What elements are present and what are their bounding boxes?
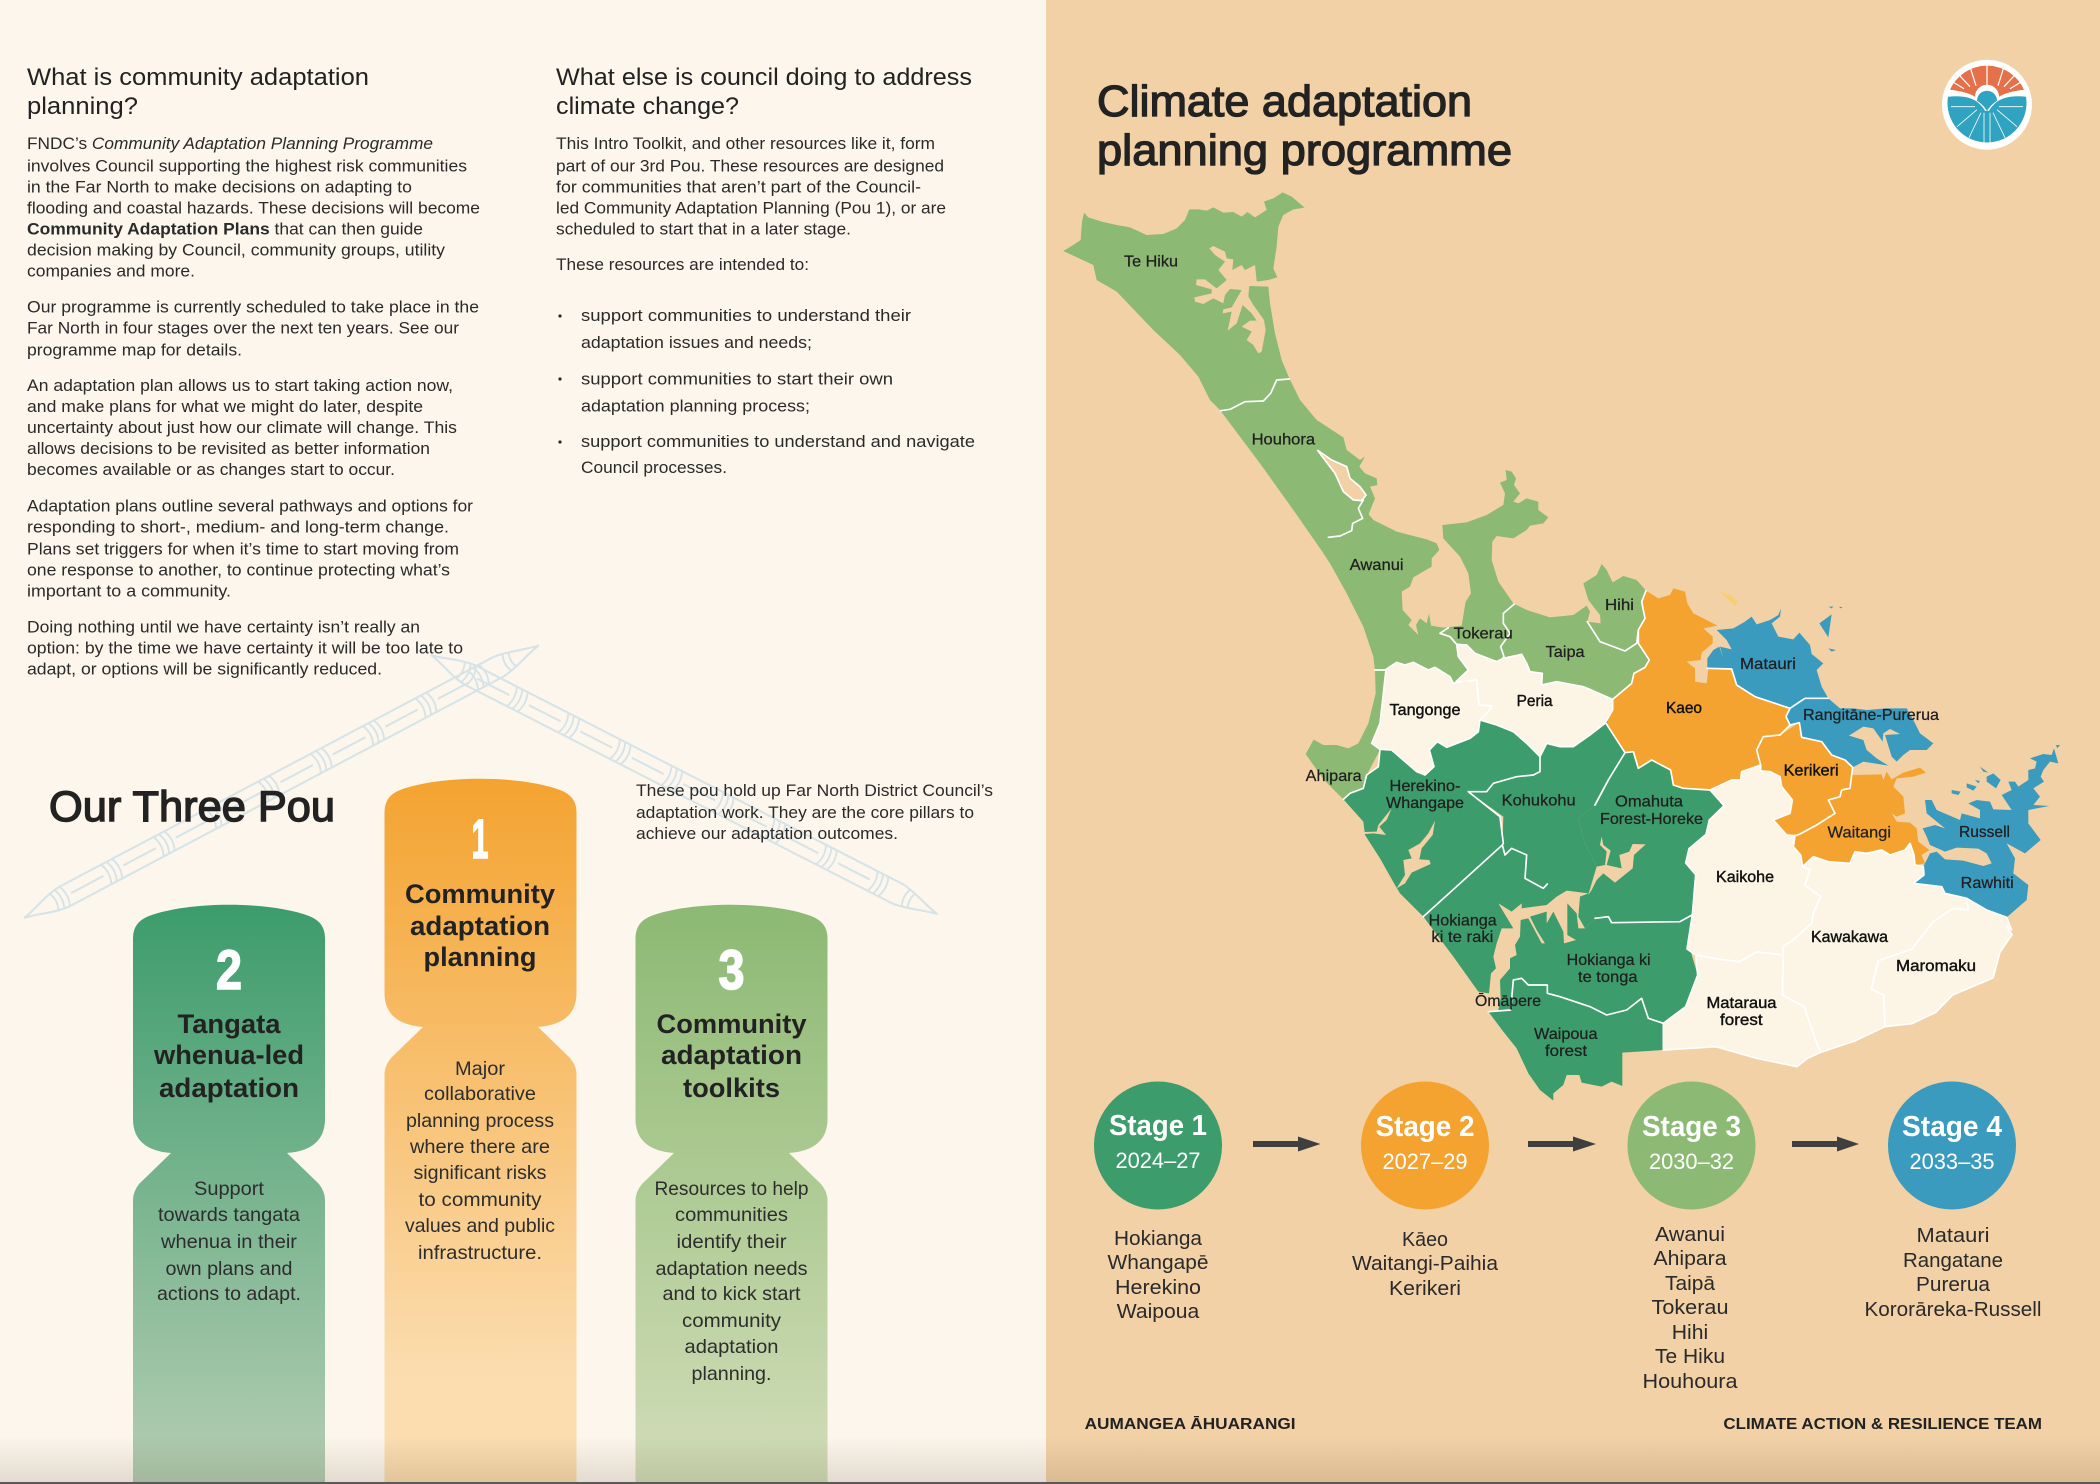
description: values and public	[405, 1215, 555, 1237]
map labels: Kerikeri	[1784, 763, 1839, 780]
description: where there are	[409, 1136, 550, 1158]
title: climate adaptation planning programme: planning programme	[1097, 126, 1512, 175]
description: community	[682, 1310, 781, 1332]
text: pou intro: adaptation work. They are the core pillars to	[636, 804, 974, 822]
pillar 2: tangata whenua-led adaptation	[133, 905, 325, 1484]
bullet list: adaptation issues and needs;	[581, 334, 812, 352]
crossed rafter poles	[19, 636, 942, 928]
paragraph 5: Doing nothing until we have certainty isn’t really an	[27, 618, 420, 636]
stage 4: Stage 4	[1902, 1111, 2002, 1143]
description: identify their	[676, 1231, 787, 1253]
title: Community	[656, 1009, 806, 1039]
description	[654, 1178, 809, 1385]
map labels: Whangape	[1386, 795, 1464, 812]
stage 4 areas: Matauri	[1916, 1225, 1990, 1247]
text: pou intro	[636, 782, 993, 843]
region: rangitane-purerua	[1786, 698, 1933, 767]
map labels: forest	[1720, 1012, 1763, 1029]
bullet list: adaptation planning process;	[581, 397, 810, 415]
region: kaikohe	[1686, 765, 1821, 962]
paragraph 2: programme map for details.	[27, 341, 242, 359]
map: far north district adaptation areas	[1063, 192, 2060, 1101]
stage 1 areas	[1108, 1228, 1208, 1323]
paragraph 4: one response to another, to continue protecting what’s	[27, 562, 450, 580]
description: actions to adapt.	[157, 1283, 301, 1305]
description: Major	[455, 1058, 506, 1080]
pillar 1: community adaptation planning	[384, 779, 576, 1484]
paragraph 3: uncertainty about just how our climate will change. This	[27, 419, 457, 437]
title: adaptation	[159, 1073, 299, 1103]
heading: climate change?	[556, 93, 739, 120]
map labels: Hokianga	[1429, 912, 1497, 930]
title: planning	[424, 942, 536, 972]
paragraph 1: companies and more.	[27, 262, 195, 280]
paragraph 4: Adaptation plans outline several pathways and options for	[27, 498, 474, 516]
map labels: Taipa	[1546, 644, 1585, 661]
map labels: Matauri	[1740, 656, 1796, 673]
map labels: forest	[1545, 1043, 1588, 1060]
title: adaptation	[661, 1040, 802, 1070]
description: to community	[418, 1189, 542, 1211]
text: pou intro: These pou hold up Far North District Council’s	[636, 782, 993, 800]
areas: east coast stages 2 and 4	[1663, 592, 2060, 1067]
stage 2 areas	[1352, 1229, 1499, 1300]
panel: right background	[1046, 0, 2100, 1484]
description: infrastructure.	[418, 1242, 542, 1264]
areas: kaeo	[1595, 588, 1790, 805]
areas: awanui, tokerau, taipa, hihi, ahipara	[1306, 470, 1649, 800]
paragraph 5: adapt, or options will be significantly reduced.	[27, 660, 382, 678]
boundaries	[1595, 591, 1710, 805]
bottom page shadow	[0, 1436, 2100, 1484]
description: adaptation	[684, 1336, 778, 1358]
map labels: Russell	[1959, 824, 2010, 841]
title	[405, 879, 555, 972]
islands: matauri	[1819, 607, 1843, 652]
stage 1 areas: Herekino	[1115, 1277, 1201, 1299]
map labels: ki te raki	[1431, 929, 1493, 946]
paragraph 5: option: by the time we have certainty it will be too late to	[27, 639, 463, 657]
stage 1 areas: Whangapē	[1108, 1252, 1208, 1274]
stage 1 areas: Waipoua	[1117, 1301, 1200, 1323]
boundaries	[1328, 500, 1638, 670]
region: kohukohu	[1468, 713, 1625, 897]
paragraph	[556, 135, 946, 274]
areas: te hiku and houhora	[1063, 192, 1377, 565]
map labels: Tokerau	[1454, 626, 1513, 642]
region: russell and rawhiti	[1913, 748, 2058, 917]
bullet list: support communities to understand their	[581, 307, 912, 325]
region: mataraua forest	[1663, 952, 1821, 1067]
map labels: Tangonge	[1390, 702, 1461, 719]
islands: russell	[1952, 745, 2060, 795]
icon: logo roundel	[1942, 60, 2032, 150]
map labels: Hihi	[1605, 597, 1634, 614]
stage 2 areas: Waitangi-Paihia	[1352, 1253, 1499, 1275]
description: whenua in their	[160, 1231, 298, 1253]
region: omahuta forest-horeke	[1578, 752, 1724, 928]
title	[656, 1009, 806, 1103]
paragraph 2: Far North in four stages over the next ten years. See our	[27, 319, 460, 337]
bullet list: support communities to understand and navigate	[581, 433, 975, 451]
stage 3 areas: Ahipara	[1654, 1248, 1727, 1270]
stage 4: 2033–35	[1910, 1149, 1994, 1174]
map labels	[1124, 254, 2014, 1060]
heading: What is community adaptation	[27, 64, 369, 91]
arrow	[1528, 1136, 1596, 1152]
paragraph: scheduled to start that in a later stage.	[556, 220, 851, 238]
region: peria	[1456, 644, 1613, 757]
island	[1719, 592, 1738, 606]
paragraph: for communities that aren’t part of the Council-	[556, 178, 921, 196]
region: maromaku	[1871, 898, 2012, 1027]
description: Resources to help	[654, 1178, 809, 1200]
stage 3 areas: Hihi	[1672, 1322, 1708, 1344]
map labels: Te Hiku	[1124, 254, 1178, 270]
description: communities	[675, 1204, 788, 1226]
title: adaptation	[410, 911, 550, 941]
inlet: whangape harbour	[1397, 821, 1435, 888]
region: kawakawa	[1782, 843, 1968, 1052]
map labels: Kaikohe	[1716, 869, 1774, 886]
heading	[556, 64, 972, 120]
heading: our three pou: Our Three Pou	[49, 783, 335, 831]
stage 2: 2027–29	[1382, 1149, 1468, 1174]
paragraph: This Intro Toolkit, and other resources like it, form	[556, 135, 935, 153]
paragraph 4: important to a community.	[27, 582, 231, 600]
paragraph 1: FNDC’s Community Adaptation Planning Programme	[27, 135, 433, 153]
paragraph 2	[27, 298, 479, 359]
stage 4 areas: Kororāreka-Russell	[1864, 1299, 2042, 1321]
paragraph 3: and make plans for what we might do later, despite	[27, 398, 423, 416]
stage 3 areas: Tokerau	[1652, 1297, 1728, 1319]
map labels: Waitangi	[1828, 825, 1891, 842]
bullet list: support communities to start their own	[581, 370, 893, 388]
region: waitangi	[1793, 768, 1929, 867]
description: towards tangata	[158, 1204, 300, 1226]
boundary: ahipara	[1343, 749, 1380, 799]
paragraph: These resources are intended to:	[556, 256, 809, 274]
map labels: te tonga	[1578, 969, 1638, 986]
region: tangonge	[1372, 662, 1492, 775]
stage 3 areas: Houhoura	[1642, 1371, 1738, 1393]
description	[157, 1178, 301, 1305]
paragraph 3: allows decisions to be revisited as better information	[27, 440, 430, 458]
paragraph 1: Community Adaptation Plans that can then guide	[27, 220, 423, 238]
region: hokianga ki te raki	[1423, 845, 1557, 993]
map labels: Mataraua	[1706, 995, 1777, 1012]
inlet: parengarenga harbour	[1194, 246, 1268, 353]
boundaries	[1707, 668, 1853, 836]
paragraph 4: responding to short-, medium- and long-term change.	[27, 518, 449, 536]
stage 3: Stage 3	[1642, 1111, 1741, 1143]
stage 3 areas: Taipā	[1665, 1273, 1716, 1295]
paragraph 1: decision making by Council, community groups, utility	[27, 242, 446, 260]
map labels: Herekino-	[1390, 778, 1460, 795]
map labels: Kohukohu	[1502, 792, 1576, 810]
map labels: Forest-Horeke	[1600, 811, 1703, 828]
title	[153, 1009, 304, 1103]
bullet list	[558, 307, 975, 477]
map labels: Hokianga ki	[1567, 952, 1651, 969]
pillar 3: community adaptation toolkits	[636, 905, 828, 1484]
areas: dark green stage 1	[1344, 713, 1724, 1101]
stage 1: Stage 1	[1109, 1110, 1207, 1142]
stage 2 areas: Kerikeri	[1389, 1278, 1461, 1300]
text block: what is community adaptation planning	[27, 64, 480, 678]
region: kerikeri	[1757, 723, 1853, 835]
title: climate adaptation planning programme	[1097, 77, 1512, 175]
paragraph: led Community Adaptation Planning (Pou 1), or are	[556, 199, 946, 217]
number: 2	[216, 938, 242, 1001]
description: planning process	[406, 1110, 554, 1132]
description: and to kick start	[662, 1283, 801, 1305]
paragraph 3	[27, 377, 457, 479]
stage 3	[1628, 1082, 1756, 1393]
paragraph 4	[27, 498, 474, 600]
stage 1: 2024–27	[1116, 1148, 1200, 1173]
paragraph 5	[27, 618, 463, 678]
region: matauri	[1707, 608, 1828, 708]
map labels: Maromaku	[1896, 958, 1976, 975]
stage 1	[1094, 1082, 1222, 1323]
paragraph 1	[27, 135, 480, 280]
stage 2 areas: Kāeo	[1402, 1229, 1448, 1251]
map labels: Waipoua	[1534, 1026, 1598, 1043]
panel: left background	[0, 0, 1046, 1484]
arrow	[1792, 1136, 1859, 1152]
paragraph 2: Our programme is currently scheduled to take place in the	[27, 298, 479, 316]
arrow	[1253, 1136, 1320, 1152]
map labels: Houhora	[1252, 432, 1315, 448]
stage 2: Stage 2	[1376, 1111, 1474, 1143]
map labels: Ōmāpere	[1475, 992, 1541, 1010]
bullet list: Council processes.	[581, 459, 727, 477]
description: own plans and	[166, 1258, 292, 1280]
description: significant risks	[414, 1162, 547, 1184]
title: climate adaptation planning programme: Climate adaptation	[1097, 77, 1472, 126]
boundary	[1221, 379, 1289, 411]
text block: what else is council doing	[556, 64, 975, 477]
stage 3: 2030–32	[1649, 1149, 1734, 1174]
number: 1	[472, 807, 488, 870]
stage 4 areas: Rangatane	[1903, 1250, 2003, 1272]
map labels: Omahuta	[1615, 794, 1683, 811]
title: Tangata	[178, 1009, 281, 1039]
footer: climate action and resilience team: CLIMATE ACTION & RESILIENCE TEAM	[1723, 1416, 2042, 1433]
description: Support	[194, 1178, 265, 1200]
map labels: Kawakawa	[1811, 929, 1888, 946]
description	[405, 1058, 555, 1264]
region: waipoua forest	[1488, 978, 1663, 1101]
stage 3 areas	[1642, 1224, 1738, 1393]
region: herekino-whangape	[1344, 713, 1547, 917]
stage 4 areas	[1864, 1225, 2042, 1321]
map labels: Rangitāne-Purerua	[1803, 707, 1939, 724]
paragraph 3: becomes available or as changes start to occur.	[27, 461, 395, 479]
text: pou intro: achieve our adaptation outcomes.	[636, 825, 898, 843]
paragraph 1: involves Council supporting the highest risk communities	[27, 157, 467, 175]
stage 3 areas: Awanui	[1655, 1224, 1725, 1246]
region: hokianga ki te tonga	[1498, 903, 1698, 1023]
description: collaborative	[424, 1083, 536, 1105]
stage 4 areas: Purerua	[1916, 1274, 1991, 1296]
description: adaptation needs	[656, 1258, 808, 1280]
footer: aumangea ahuarangi: AUMANGEA ĀHUARANGI	[1085, 1414, 1296, 1433]
heading: What else is council doing to address	[556, 64, 972, 91]
paragraph 1: flooding and coastal hazards. These decisions will become	[27, 199, 480, 217]
map labels: Peria	[1517, 693, 1553, 710]
map labels: Rawhiti	[1961, 875, 2014, 892]
areas: tangonge and peria	[1343, 644, 1613, 799]
inlet: omahuta branches	[1588, 837, 1646, 895]
map labels: Kaeo	[1666, 700, 1702, 717]
heading	[27, 64, 369, 120]
inlet: herekino harbour	[1364, 808, 1392, 835]
description: planning.	[692, 1363, 772, 1385]
title: toolkits	[683, 1073, 780, 1103]
stage 3 areas: Te Hiku	[1655, 1346, 1725, 1368]
paragraph 4: Plans set triggers for when it’s time to start moving from	[27, 540, 459, 558]
boundaries	[1423, 757, 1692, 1023]
paragraph 3: An adaptation plan allows us to start taking action now,	[27, 377, 453, 395]
number: 3	[718, 938, 744, 1001]
heading: planning?	[27, 93, 138, 120]
inlet: houhora harbour	[1317, 450, 1366, 501]
map labels: Awanui	[1350, 557, 1404, 574]
stage 1 areas: Hokianga	[1114, 1228, 1203, 1250]
paragraph: part of our 3rd Pou. These resources are designed	[556, 157, 944, 175]
title: Community	[405, 879, 555, 909]
title: whenua-led	[153, 1040, 304, 1070]
paragraph 1: in the Far North to make decisions on adapting to	[27, 178, 412, 196]
stage 2	[1352, 1082, 1499, 1300]
stage 4	[1864, 1082, 2042, 1321]
map labels: Ahipara	[1306, 768, 1362, 785]
